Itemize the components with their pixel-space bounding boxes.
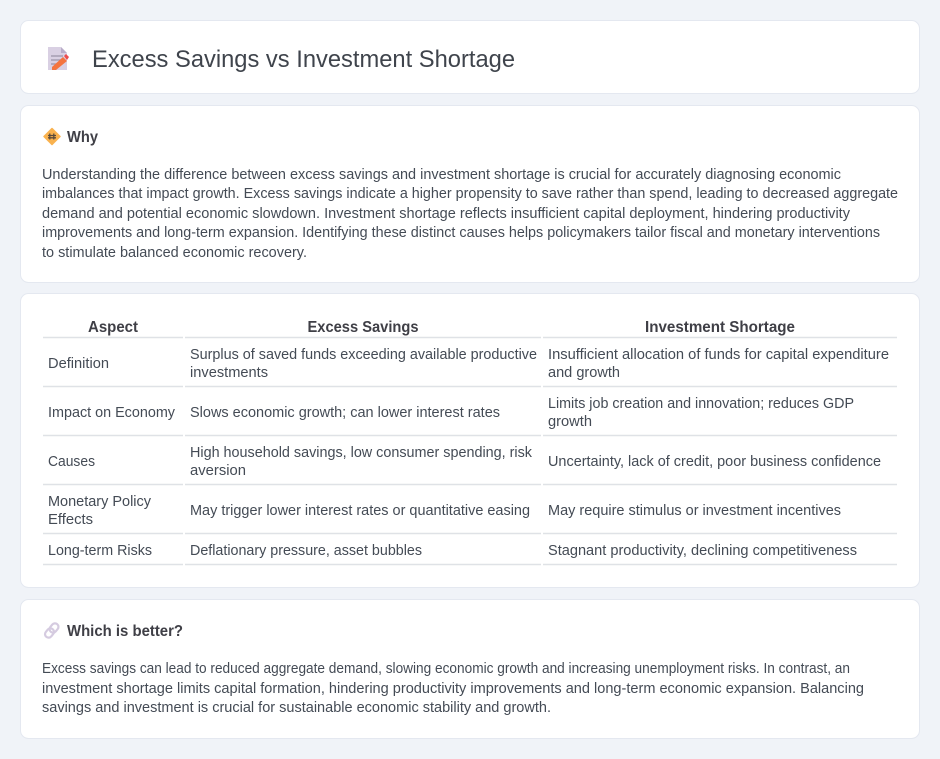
- table header row: Investment Shortage: [645, 319, 795, 336]
- table row: impact on economy: Limits job creation and innovation; reduces GDP: [548, 396, 854, 412]
- panel: which is better: [20, 600, 920, 738]
- table row: definition: Definition: [48, 356, 109, 372]
- text block: which is better explanation: investment shortage limits capital formation, hindering productivity improvements and long-term economic expansion. Balancing: [42, 681, 864, 697]
- table row: monetary policy effects: May require stimulus or investment incentives: [548, 503, 841, 519]
- table row: monetary policy effects: May trigger lower interest rates or quantitative easing: [190, 503, 530, 519]
- table row: causes: Uncertainty, lack of credit, poor business confidence: [548, 454, 881, 470]
- text block: why explanation: demand and potential economic slowdown. Investment shortage reflects insufficient capital deployment, hindering productivity: [42, 206, 851, 222]
- table row: definition: [48, 347, 889, 381]
- text block: which is better explanation: savings and investment is crucial for sustainable economic stability and growth.: [42, 700, 551, 716]
- panel: header: [20, 20, 920, 94]
- table row: long-term risks: [48, 543, 857, 559]
- panel: why: [20, 106, 920, 282]
- table row: impact on economy: Impact on Economy: [48, 405, 176, 421]
- text block: why explanation: imbalances that impact growth. Excess savings indicate a higher propensity to save rather than spend, leading to decreased aggregate: [42, 186, 898, 202]
- table header row: Aspect: [88, 319, 139, 336]
- text block: which is better explanation: [42, 661, 864, 716]
- text block: which is better explanation: Excess savings can lead to reduced aggregate demand, slowing economic growth and increasing unemployment risks. In contrast, an: [42, 661, 850, 677]
- table header row: [88, 319, 795, 336]
- table row: causes: [48, 445, 881, 479]
- table row: definition: investments: [190, 365, 268, 381]
- table row: monetary policy effects: [48, 494, 841, 528]
- heading: which is better: Which is better?: [67, 623, 183, 640]
- icon: orange diamond sign: [44, 128, 60, 144]
- text block: why explanation: Understanding the difference between excess savings and investment shortage is crucial for accurately diagnosing economic: [42, 167, 841, 183]
- table row: impact on economy: Slows economic growth; can lower interest rates: [190, 405, 500, 421]
- table row: long-term risks: Long-term Risks: [48, 543, 152, 559]
- text block: why explanation: to stimulate balanced economic recovery.: [42, 245, 307, 261]
- table row: long-term risks: Stagnant productivity, declining competitiveness: [548, 543, 857, 559]
- table row: definition: Insufficient allocation of funds for capital expenditure: [548, 347, 889, 363]
- table row: long-term risks: Deflationary pressure, asset bubbles: [190, 543, 422, 559]
- table row: causes: Causes: [48, 454, 95, 470]
- table row: impact on economy: growth: [548, 414, 592, 430]
- text block: why explanation: improvements and long-term expansion. Identifying these distinct causes helps policymakers tailor fiscal and monetary interventions: [42, 225, 880, 241]
- panel: comparison table: [20, 294, 920, 588]
- icon: chain link: [44, 622, 60, 639]
- table row: causes: aversion: [190, 463, 246, 479]
- table row: causes: High household savings, low consumer spending, risk: [190, 445, 533, 461]
- table row: monetary policy effects: Effects: [48, 512, 93, 528]
- title: Excess Savings vs Investment Shortage: [92, 46, 515, 73]
- table row: impact on economy: [48, 396, 854, 430]
- icon: document with pencil: [48, 47, 69, 70]
- text block: why explanation: [42, 167, 898, 261]
- table row: definition: Surplus of saved funds exceeding available productive: [190, 347, 537, 363]
- table header row: Excess Savings: [308, 319, 419, 336]
- heading: why: Why: [67, 129, 98, 146]
- table row: definition: and growth: [548, 365, 620, 381]
- table row: monetary policy effects: Monetary Policy: [48, 494, 152, 510]
